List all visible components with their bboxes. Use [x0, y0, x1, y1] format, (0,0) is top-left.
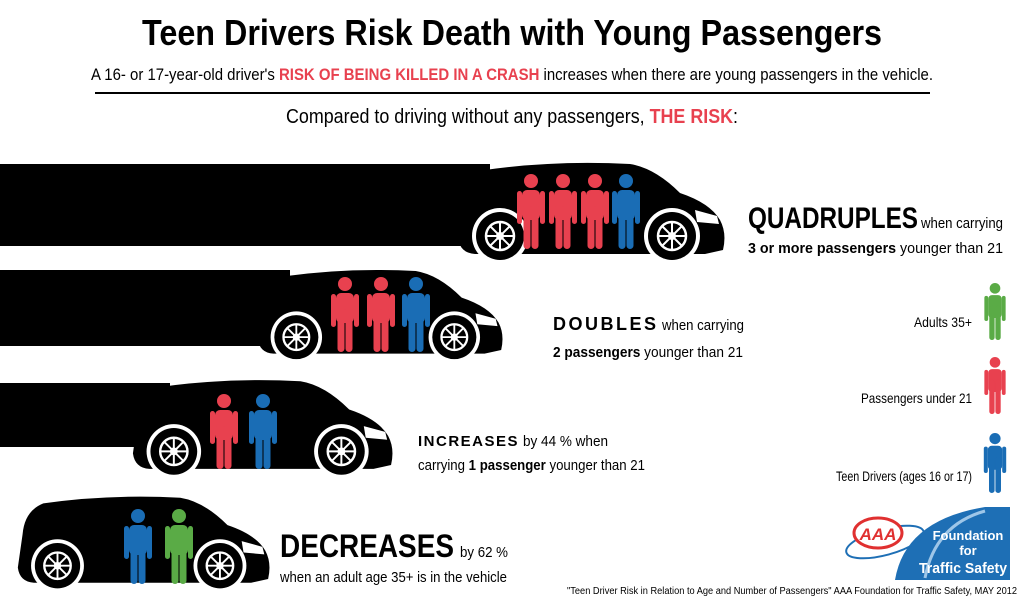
text: quadruples: QUADRUPLES	[748, 202, 918, 235]
legend: Teen Drivers (ages 16 or 17)	[836, 468, 972, 484]
legend	[836, 283, 1006, 493]
car 3: increases	[0, 380, 392, 479]
title: Teen Drivers Risk Death with Young Passengers	[142, 12, 882, 53]
text: decreases: by 62 %	[460, 544, 508, 561]
text: decreases: when an adult age 35+ is in the vehicle	[279, 569, 507, 586]
legend: Adults 35+	[914, 314, 972, 330]
text: quadruples	[748, 202, 1003, 257]
intro text: Compared to driving without any passengers, THE RISK:	[286, 106, 738, 128]
text: doubles	[553, 314, 744, 361]
car 1: quadruples	[0, 163, 724, 264]
text: doubles: 2 passengers younger than 21	[553, 344, 743, 361]
text: increases: INCREASES	[418, 433, 519, 450]
logo: AAA Foundation for Traffic Safety: AAA	[859, 525, 896, 544]
text: decreases: DECREASES	[280, 528, 454, 564]
legend: Passengers under 21	[861, 390, 972, 406]
text: doubles: DOUBLES	[553, 314, 659, 334]
car 4: decreases	[18, 497, 269, 592]
logo: AAA Foundation for Traffic Safety	[843, 507, 1010, 580]
text: quadruples: when carrying	[920, 215, 1003, 232]
text: quadruples: 3 or more passengers younger than 21	[748, 240, 1003, 257]
text: increases	[418, 433, 645, 474]
text: doubles: when carrying	[661, 317, 744, 334]
subtitle: A 16- or 17-year-old driver's RISK OF BEING KILLED IN A CRASH increases when there are young passengers in the vehicle.	[91, 65, 933, 84]
logo: AAA Foundation for Traffic Safety: Foundation	[933, 528, 1003, 543]
text: increases: carrying 1 passenger younger than 21	[418, 457, 645, 474]
text: decreases	[279, 528, 508, 586]
car 2: doubles	[0, 270, 502, 363]
logo: AAA Foundation for Traffic Safety: Traffic Safety	[919, 560, 1008, 577]
logo: AAA Foundation for Traffic Safety: for	[959, 543, 977, 558]
text: increases: by 44 % when	[523, 433, 608, 450]
